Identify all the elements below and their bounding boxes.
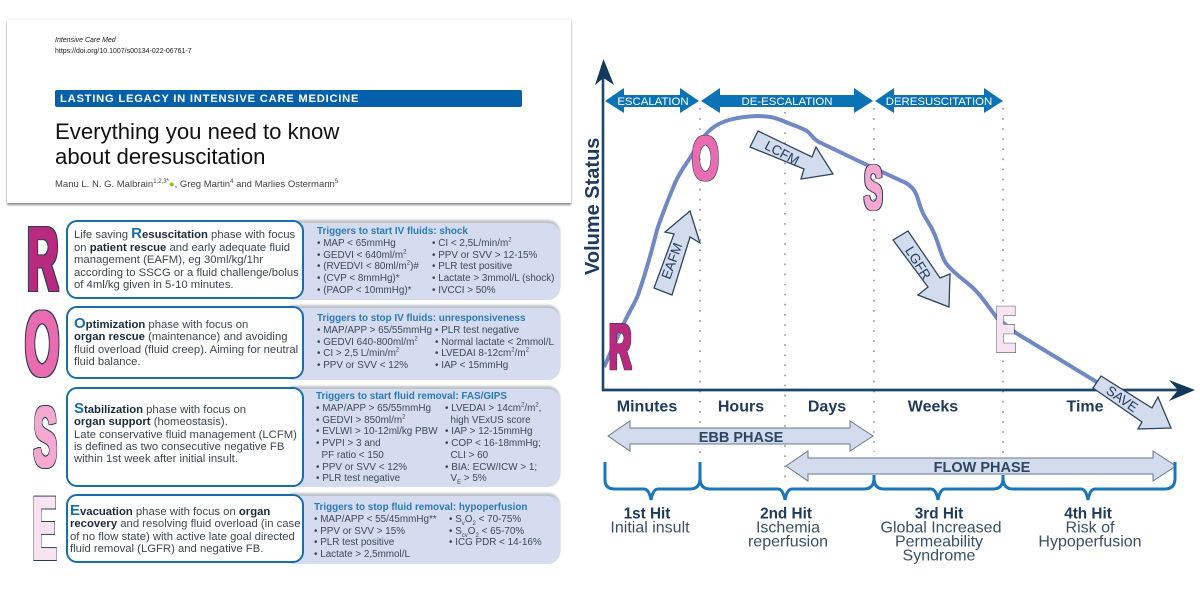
list: optimization triggers right: • PLR test negative — [435, 325, 519, 336]
label: 4th hit — [1038, 506, 1142, 550]
label: 3rd hit: Permeability — [895, 534, 983, 550]
arrow: SAVE: SAVE — [1103, 383, 1141, 415]
list: stabilization triggers right: • LVEDAI > 14cm2/m2, — [445, 403, 541, 414]
brace: first hit — [605, 462, 700, 500]
list: stabilization triggers left: • PLR test negative — [316, 473, 400, 484]
list: optimization triggers left: • CI > 2,5 L/min/m2 — [317, 348, 399, 359]
list: evacuation triggers right: • ScvO2 < 65-70% — [449, 526, 524, 539]
list: stabilization triggers left: • PVPI > 3 and — [316, 438, 381, 449]
list: evacuation triggers left: • PLR test positive — [314, 537, 394, 548]
panel: resuscitation triggers — [290, 223, 560, 300]
arrow: LGFR — [893, 231, 950, 307]
arrow: LCFM: LCFM — [762, 138, 802, 168]
list: evacuation triggers right: • SvO2 < 70-75% — [449, 514, 521, 527]
list: resuscitation triggers right — [432, 237, 554, 296]
journal citation: https://doi.org/10.1007/s00134-022-06761-7 — [55, 48, 192, 54]
panel: resuscitation description: management (EAFM), eg 30ml/kg/1hr — [74, 254, 263, 266]
panel: stabilization description: organ support (homeostasis). — [74, 416, 228, 428]
list: stabilization triggers left: • GEDVI > 850ml/m2 — [316, 414, 405, 426]
panel: evacuation description — [66, 494, 304, 563]
panel: stabilization description — [66, 387, 304, 487]
list: resuscitation triggers left — [317, 238, 419, 296]
heading: triggers to start IV fluids: Triggers to start IV fluids: shock — [317, 226, 468, 237]
panel: evacuation triggers — [290, 496, 560, 564]
list: stabilization triggers left: • PPV or SVV < 12% — [316, 462, 407, 473]
list: evacuation triggers left: • PPV or SVV > 15% — [314, 526, 405, 537]
list: optimization triggers right: • LVEDAI 8-12cm2/m2 — [435, 348, 529, 359]
banner: lasting legacy: LASTING LEGACY IN INTENSIVE CARE MEDICINE — [60, 93, 359, 105]
arrow: deresuscitation: DERESUSCITATION — [886, 96, 992, 108]
heading: triggers to start fluid removal: Triggers to start fluid removal: FAS/GIPS — [316, 391, 507, 402]
list: evacuation triggers left: • Lactate > 2,5mmol/L — [314, 549, 410, 560]
panel: stabilization description: is defined as two consecutive negative FB — [74, 441, 284, 453]
arrow: EAFM: EAFM — [659, 241, 685, 281]
panel: optimization description: fluid overload (fluid creep). Aiming for neutral — [74, 344, 298, 356]
panel: evacuation description: fluid removal (LGFR) and negative FB. — [70, 543, 263, 555]
arrow: ebb phase — [608, 421, 873, 451]
list: stabilization triggers right: VE > 5% — [450, 473, 487, 486]
list: evacuation triggers left: • MAP/APP < 55/45mmHg** — [314, 514, 437, 525]
list: stabilization triggers right: • COP < 16-18mmHg; — [445, 438, 541, 449]
label: 3rd hit: Syndrome — [903, 548, 976, 564]
list: stabilization triggers right: high VExUS score — [450, 415, 531, 426]
arrow: deresuscitation — [875, 88, 1003, 113]
panel: evacuation description: Evacuation phase with focus on organ — [70, 502, 270, 519]
list: stabilization triggers right: • IAP > 12-15mmHg — [445, 426, 533, 437]
panel: resuscitation description: on patient rescue and early adequate fluid — [74, 242, 290, 254]
panel: resuscitation description: of 4ml/kg given in 5-10 minutes. — [74, 279, 234, 291]
label: 3rd hit: Global Increased — [881, 520, 1001, 536]
list: optimization triggers right — [435, 325, 554, 371]
time labels — [617, 398, 1104, 416]
list: optimization triggers left — [317, 325, 432, 371]
panel: resuscitation description — [66, 220, 304, 299]
list: stabilization triggers right: CLI > 60 — [450, 450, 488, 461]
panel: optimization triggers — [290, 308, 560, 380]
panel: resuscitation description: Life saving Resuscitation phase with focus — [74, 225, 295, 242]
arrow: escalation — [605, 88, 699, 113]
list: resuscitation triggers right: • CI < 2,5L/min/m2 — [432, 238, 512, 249]
list: stabilization triggers left: • MAP/APP > 65/55mmHg — [316, 403, 431, 414]
arrow: escalation: ESCALATION — [617, 96, 689, 108]
list: optimization triggers left: • GEDVI 640-800ml/m2 — [317, 336, 418, 348]
banner: lasting legacy — [55, 90, 522, 107]
y axis — [595, 59, 614, 391]
list: resuscitation triggers left: • GEDVI < 640ml/m2 — [317, 249, 406, 261]
label: 2nd hit: Ischemia — [756, 520, 820, 536]
panel: optimization description: Optimization phase with focus on — [74, 315, 248, 332]
panel: evacuation description: of no flow state) with active late goal directed — [70, 531, 295, 543]
label: 1st hit: Initial insult — [610, 520, 690, 536]
list: evacuation triggers left — [314, 514, 437, 560]
list: optimization triggers left: • PPV or SVV < 12% — [317, 360, 408, 371]
arrow: EAFM — [654, 211, 700, 295]
x axis — [602, 380, 1195, 401]
arrow: de-escalation: DE-ESCALATION — [742, 96, 832, 108]
panel: evacuation description: recovery and resolving fluid overload (in case — [70, 518, 300, 530]
list: stabilization triggers left: PF ratio < 150 — [321, 450, 384, 461]
brace: third hit — [874, 475, 1003, 500]
label: 2nd hit: reperfusion — [748, 534, 828, 550]
panel: resuscitation description: according to SSCG or a fluid challenge/bolus — [74, 266, 299, 278]
letter O: O — [25, 294, 59, 395]
arrow: flow phase: FLOW PHASE — [934, 460, 1031, 476]
panel: stabilization description: Late conservative fluid management (LCFM) — [74, 429, 297, 441]
title — [55, 119, 340, 169]
journal citation — [55, 36, 192, 54]
label: 2nd hit: 2nd Hit — [760, 506, 812, 522]
panel: optimization description: organ rescue (maintenance) and avoiding — [74, 331, 288, 343]
label: 4th hit: Risk of — [1066, 520, 1115, 536]
time labels: Days — [808, 398, 846, 416]
letter S: S — [34, 390, 57, 484]
panel: stabilization description: within 1st week after initial insult. — [74, 453, 238, 465]
list: resuscitation triggers right: • Lactate > 3mmol/L (shock) — [432, 273, 554, 284]
time labels: Hours — [718, 398, 764, 416]
list: optimization triggers right: • Normal lactate < 2mmol/L — [435, 337, 554, 348]
curve: volume status — [604, 116, 1100, 384]
arrow: SAVE — [1093, 376, 1171, 429]
marker: R: R — [609, 310, 631, 383]
arrow: ebb phase: EBB PHASE — [699, 430, 784, 446]
panel: paper header card — [7, 20, 571, 203]
arrow: LCFM — [750, 131, 833, 179]
panel: stabilization description: Stabilization phase with focus on — [74, 400, 246, 417]
marker: E: E — [996, 294, 1016, 366]
journal citation: Intensive Care Med — [55, 37, 116, 44]
label: 3rd hit — [881, 506, 1001, 564]
list: resuscitation triggers left: • MAP < 65mmHg — [317, 238, 396, 249]
label: 4th hit: Hypoperfusion — [1038, 534, 1142, 550]
panel: optimization description: fluid balance. — [74, 356, 141, 368]
list: stabilization triggers right — [445, 402, 541, 486]
marker: S: S — [864, 154, 883, 223]
list: resuscitation triggers right: • PPV or SVV > 12-15% — [432, 250, 537, 261]
list: stabilization triggers left: • EVLWI > 10-12ml/kg PBW — [316, 426, 438, 437]
heading: triggers to stop IV fluids: Triggers to stop IV fluids: unresponsiveness — [317, 313, 526, 324]
list: optimization triggers left: • MAP/APP > 65/55mmHg — [317, 325, 432, 336]
time labels: Time — [1066, 398, 1104, 416]
arrow: de-escalation — [701, 88, 873, 113]
authors: Manu L. N. G. Malbrain1,2,3*●, Greg Martin4 and Marlies Ostermann5 — [55, 179, 338, 190]
letter R: R — [27, 210, 58, 309]
label: 4th hit: 4th Hit — [1064, 506, 1112, 522]
list: optimization triggers right: • IAP < 15mmHg — [435, 360, 508, 371]
title: about deresuscitation — [55, 144, 265, 169]
list: resuscitation triggers left: • (RVEDVI < 80ml/m2)# — [317, 261, 419, 272]
list: resuscitation triggers left: • (PAOP < 10mmHg)* — [317, 285, 411, 296]
list: evacuation triggers right: • ICG PDR < 14-16% — [449, 537, 542, 548]
heading: triggers to stop fluid removal: Triggers to stop fluid removal: hypoperfusion — [314, 502, 527, 513]
list: resuscitation triggers left: • (CVP < 8mmHg)* — [317, 273, 400, 284]
marker: O: O — [692, 124, 719, 193]
title: Everything you need to know — [55, 119, 339, 144]
time labels: Minutes — [617, 398, 677, 416]
list: resuscitation triggers right: • PLR test positive — [432, 261, 512, 272]
panel: optimization description — [66, 306, 304, 379]
arrow: LGFR: LGFR — [902, 244, 934, 282]
brace: second hit — [700, 475, 874, 500]
label: 3rd hit: 3rd Hit — [915, 506, 963, 522]
list: stabilization triggers right: • BIA: ECW/ICW > 1; — [445, 462, 537, 473]
panel: stabilization triggers — [290, 389, 560, 487]
panel: ROSE letters column — [24, 210, 60, 570]
list: stabilization triggers left — [316, 403, 438, 484]
arrow: flow phase — [786, 451, 1176, 481]
brace: fourth hit — [1003, 462, 1175, 500]
label: 1st hit: 1st Hit — [624, 506, 670, 522]
list: evacuation triggers right — [449, 514, 542, 548]
list: resuscitation triggers right: • IVCCI > 50% — [432, 285, 496, 296]
label: 1st hit — [610, 506, 690, 536]
label: 2nd hit — [748, 506, 828, 550]
y axis title: Volume Status — [582, 138, 604, 275]
time labels: Weeks — [908, 398, 958, 416]
